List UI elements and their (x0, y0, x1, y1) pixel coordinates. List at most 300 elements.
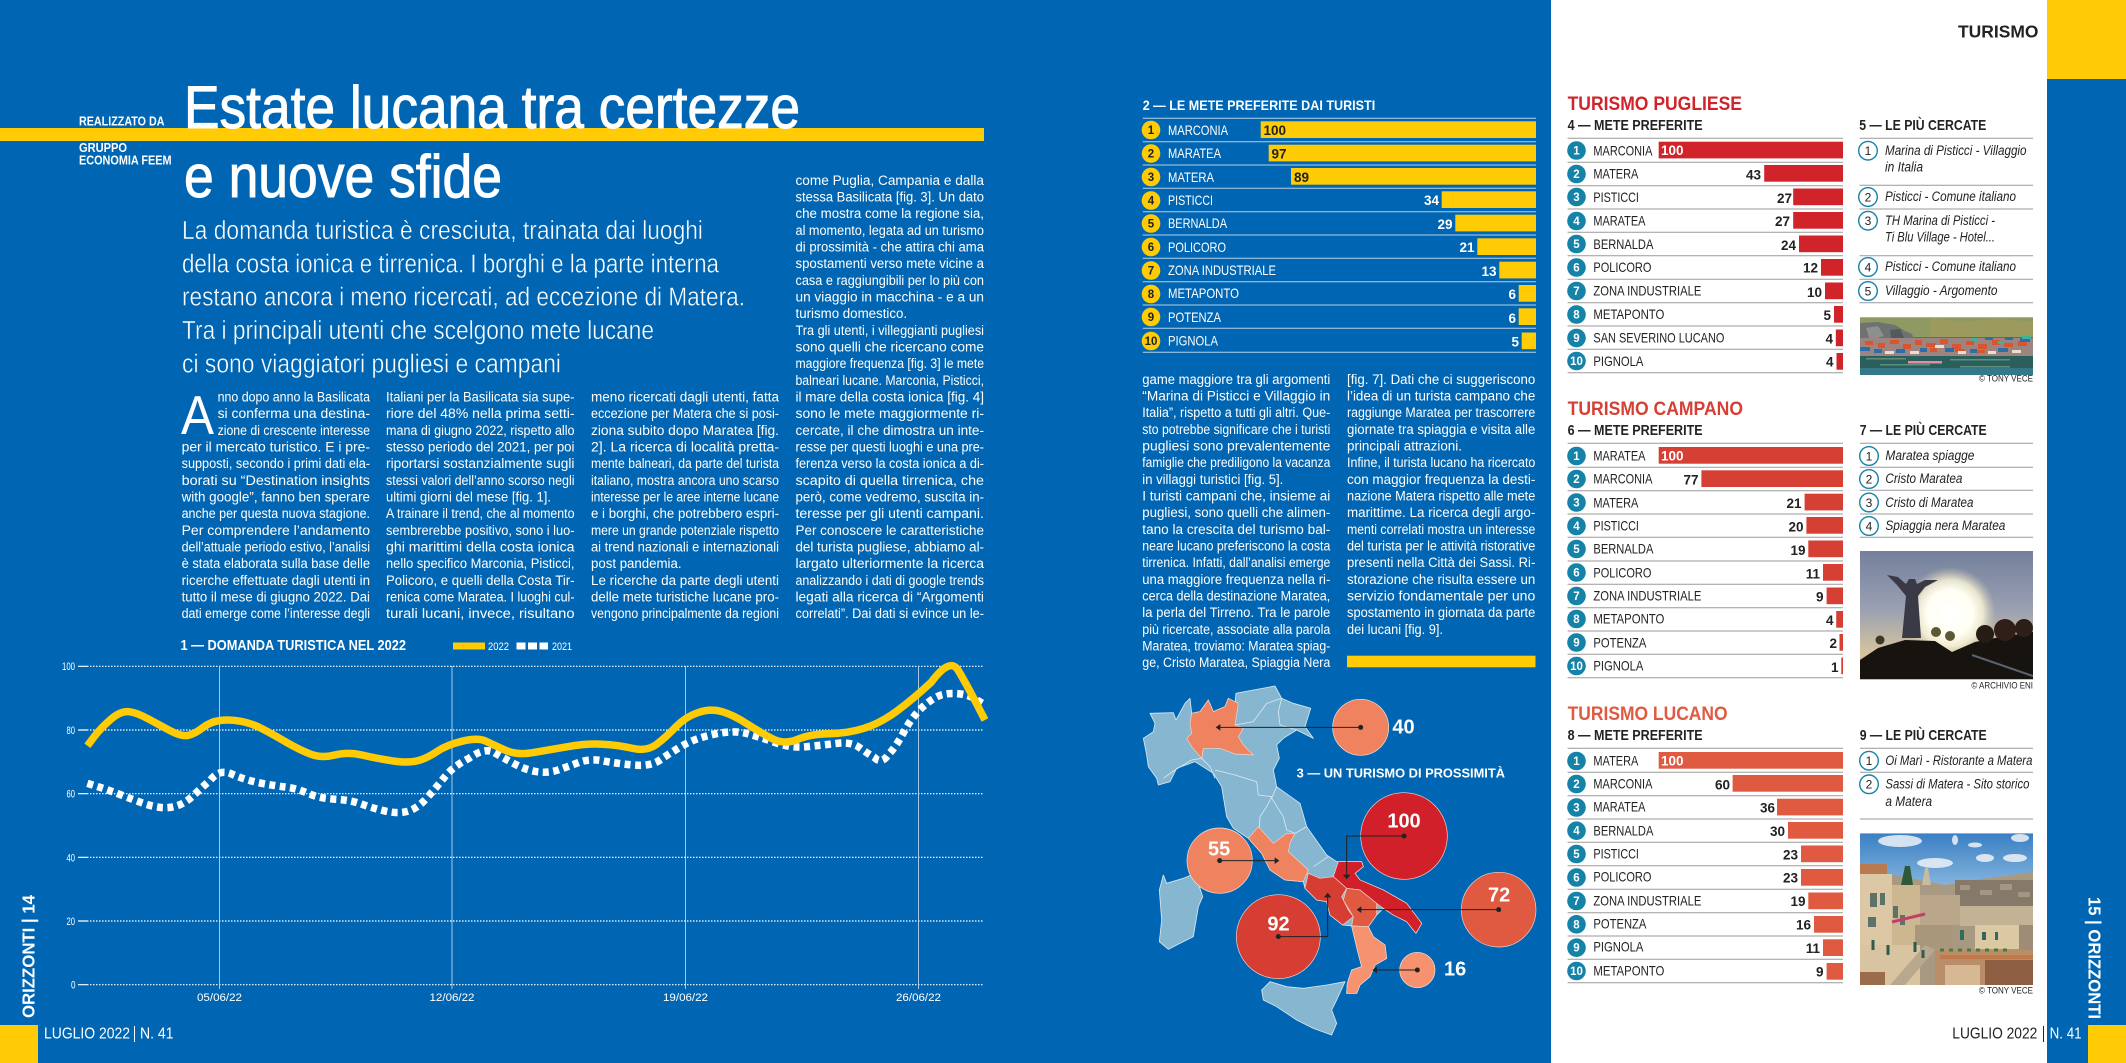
row 1: 1 (1573, 451, 1580, 463)
article column 3: italiano, mostra ancora uno scarso (591, 473, 779, 488)
row 10 (1567, 352, 1843, 370)
right article column B: principali attrazioni. (1347, 438, 1462, 454)
row 5: 19 (1790, 543, 1806, 558)
panel: white right page (1551, 0, 2047, 1063)
article column 3: mente balneari, da parte del turista (591, 456, 779, 471)
right page yellow corner (2088, 1025, 2126, 1063)
article column 1: dati emerge come l’interesse degli (182, 606, 370, 621)
row 5: 5 (1573, 544, 1580, 556)
article column 2: turali lucani, invece, risultano (386, 606, 574, 621)
article column 1: tutto il mese di giugno 2022. Dai (182, 590, 370, 604)
row 9: 4 (1825, 332, 1833, 346)
row 6 (1567, 258, 1843, 277)
right page footer: N. 41 (2050, 1025, 2082, 1042)
row 1: 100 (1661, 754, 1684, 768)
subtitle: della costa ionica e tirrenica. I borghi e la parte interna (182, 250, 720, 278)
row 8: 4 (1826, 613, 1834, 628)
list: most searched, Campania: 2 (1866, 472, 1873, 486)
article column 2: A trainare il trend, che al momento (386, 506, 574, 521)
row 2 (1142, 144, 1536, 163)
article column 2: sembrerebbe positivo, sono i luo- (386, 523, 574, 538)
bubble 72: Basilicata: 72 (1488, 885, 1510, 907)
right article column A: in villaggi turistici [fig. 5]. (1142, 472, 1283, 487)
row 2: 2 (1573, 474, 1580, 486)
list: most searched, Puglia: Ti Blu Village - Hotel... (1885, 230, 1995, 245)
row 7: 7 (1573, 286, 1580, 298)
row 2: 2 (1573, 169, 1580, 181)
row 3: 3 (1573, 802, 1580, 814)
row 4: MARATEA (1593, 212, 1646, 228)
article column 4: legati alla ricerca di “Argomenti (796, 590, 984, 604)
article column 4: Tra gli utenti, i villeggianti pugliesi (796, 323, 984, 338)
right article column A: sto potrebbe significare che i turisti (1142, 422, 1330, 437)
row 9: SAN SEVERINO LUCANO (1593, 330, 1724, 346)
row 3: MATERA (1593, 494, 1639, 510)
row 1: 100 (1661, 143, 1684, 158)
row 7 (1142, 261, 1536, 280)
row 5: BERNALDA (1593, 540, 1654, 556)
row 4: PISTICCI (1593, 518, 1639, 534)
title: Estate lucana tra certezze (184, 74, 800, 141)
right article column A (1142, 372, 1331, 670)
right article column B: nazione Matera rispetto alle mete (1347, 488, 1535, 504)
row 4: PISTICCI (1168, 192, 1213, 208)
bubble 40: Lombardia: 40 (1392, 716, 1415, 738)
row 2: 43 (1746, 168, 1761, 182)
row 3: 27 (1777, 191, 1792, 206)
list: most searched, Puglia: TH Marina di Pisticci - (1885, 213, 1995, 228)
row 8 (1567, 915, 1843, 934)
yellow end bar (1347, 656, 1536, 667)
title: e nuove sfide (184, 143, 502, 210)
row 10: PIGNOLA (1593, 353, 1644, 369)
article column 2: stesso periodo del 2021, per poi (386, 440, 574, 454)
left page footer: LUGLIO 2022 (44, 1025, 130, 1042)
drop cap: A (181, 384, 214, 446)
article column 4: scapito di quella tirrenica, che (796, 473, 984, 488)
list: most searched, Campania: 1 (1866, 449, 1873, 463)
right article column B: [fig. 7]. Dati che ci suggeriscono (1347, 372, 1535, 387)
article column 1 (181, 390, 370, 621)
row 6: 6 (1573, 872, 1580, 884)
article column 1: borati su “Destination insights (182, 473, 370, 488)
row 2: 2 (1148, 148, 1154, 160)
row 4: BERNALDA (1593, 822, 1654, 838)
article column 1: Per comprendere l’andamento (182, 523, 370, 538)
row 6: 6 (1573, 568, 1580, 580)
right article column B: del turista per le attività ristorative (1347, 538, 1535, 554)
line chart: tourist demand 2022 vs 2021: 05/06/22 (197, 992, 242, 1004)
row 3: PISTICCI (1593, 189, 1639, 205)
article column 4: il mare della costa ionica [fig. 4] (796, 390, 984, 404)
row 10 (1142, 332, 1536, 350)
article column 2: ultimi giorni del mese [fig. 1]. (386, 490, 551, 504)
heading: Turismo lucano: TURISMO LUCANO (1568, 704, 1728, 725)
row 9: PIGNOLA (1593, 938, 1644, 954)
row 8: 8 (1148, 289, 1155, 301)
article column 3: ziona subito dopo Maratea [fig. (591, 423, 779, 438)
row 1: 100 (1661, 448, 1684, 464)
right article column A: ge, Cristo Maratea, Spiaggia Nera (1142, 655, 1331, 670)
decorative yellow band (0, 128, 984, 141)
right article column A: più ricercate, associate alla parola (1142, 622, 1331, 637)
subtitle: restano ancora i meno ricercati, ad eccezione di Matera. (182, 284, 745, 312)
row 4: 4 (1573, 521, 1580, 533)
row 2 (1567, 165, 1843, 183)
article column 4: un viaggio in macchina - e a un (796, 290, 984, 304)
left page side label: ORIZZONTI | 14 (18, 895, 38, 1018)
article column 1: nno dopo anno la Basilicata (218, 390, 370, 404)
article column 4: cercate, il che dimostra un inte- (796, 423, 984, 438)
line chart: tourist demand 2022 vs 2021: 80 (66, 725, 75, 737)
article column 4: resse per questi luoghi e una pre- (796, 440, 984, 454)
right page footer: LUGLIO 2022 (1952, 1025, 2037, 1042)
row 3: 3 (1573, 498, 1580, 510)
row 9: 9 (1573, 943, 1580, 955)
bar chart: destinations preferred by tourists (1142, 118, 1536, 352)
row 6: POLICORO (1168, 239, 1226, 255)
row 6: 23 (1783, 870, 1798, 886)
row 2: 60 (1715, 778, 1730, 792)
right article column B: con maggior frequenza la desti- (1347, 472, 1535, 487)
article column 1: è stata elaborata sulla base delle (182, 556, 370, 571)
article column 3: post pandemia. (591, 556, 682, 571)
article column 3: vengono principalmente da regioni (591, 606, 779, 621)
chart 2 heading: 2 — LE METE PREFERITE DAI TURISTI (1143, 97, 1375, 113)
row 1 (1142, 121, 1536, 139)
row 6: 21 (1459, 240, 1475, 255)
row 3 (1142, 168, 1536, 186)
right article column B: l’idea di un turista campano che (1347, 388, 1535, 404)
row 5: 29 (1437, 217, 1452, 232)
list: most searched, Campania (1860, 443, 2033, 537)
row 7 (1567, 587, 1843, 605)
bubble 55: Lazio: 55 (1208, 838, 1230, 860)
row 4: 27 (1775, 214, 1790, 229)
bar chart: Campania (1567, 443, 1843, 678)
article column 4: balneari lucane. Marconia, Pisticci, (796, 373, 984, 388)
row 1: MARATEA (1593, 448, 1646, 464)
row 6: 11 (1806, 566, 1820, 582)
heading: Turismo pugliese: TURISMO PUGLIESE (1568, 94, 1742, 115)
line: 2022 yellow (87, 666, 985, 762)
row 7: 7 (1573, 591, 1580, 603)
line chart: tourist demand 2022 vs 2021: 40 (66, 852, 75, 864)
row 10: PIGNOLA (1168, 332, 1219, 348)
chart legend: 2022 (488, 641, 509, 653)
article column 4: correlati”. Dai dati si evince un le- (796, 606, 984, 621)
list: most searched, Puglia: Villaggio - Argomento (1885, 283, 1998, 298)
row 10: 1 (1831, 660, 1839, 675)
row 5 (1567, 845, 1843, 863)
heading: fig 9: 9 — LE PIÙ CERCATE (1860, 726, 1987, 744)
list: most searched, Puglia: Pisticci - Comune italiano (1885, 189, 2016, 204)
bubble 100: Puglia: 100 (1387, 810, 1421, 832)
article column 4: Per conoscere le caratteristiche (796, 523, 984, 538)
row 9: 6 (1508, 311, 1516, 326)
row 8 (1567, 305, 1843, 324)
article column 3: e i borghi, che potrebbero espri- (591, 506, 779, 521)
row 4: 20 (1788, 520, 1804, 534)
list: most searched, Basilicata: Oi Marì - Ristorante a Matera (1885, 753, 2033, 768)
row 6: POLICORO (1593, 868, 1651, 884)
row 3: MARATEA (1593, 798, 1646, 814)
yellow top right corner (2047, 0, 2126, 79)
row 5: 5 (1573, 239, 1580, 251)
row 4: 4 (1148, 196, 1155, 208)
bubble 55: Lazio (1187, 828, 1279, 893)
row 7 (1567, 282, 1843, 300)
right article column B: giornate tra spiaggia e visita alle (1347, 422, 1535, 437)
row 6: POLICORO (1593, 259, 1651, 275)
row 6: 6 (1573, 262, 1580, 274)
row 2: MATERA (1593, 166, 1639, 182)
row 5 (1567, 235, 1843, 253)
row 9: 9 (1148, 312, 1154, 324)
article column 4: stessa Basilicata [fig. 3]. Un dato (796, 190, 984, 204)
row 5: 5 (1148, 218, 1155, 230)
article column 4: del turista pugliese, abbiamo al- (796, 540, 984, 554)
list: most searched, Basilicata: Sassi di Matera - Sito storico (1885, 776, 2030, 791)
line chart: tourist demand 2022 vs 2021: 100 (62, 661, 75, 673)
row 9: 11 (1806, 941, 1820, 956)
title (184, 74, 800, 210)
row 4 (1567, 517, 1843, 535)
row 10: 10 (1570, 356, 1583, 368)
left page footer: N. 41 (140, 1025, 174, 1042)
row 9: 2 (1829, 636, 1837, 651)
article column 1: supposti, secondo i primi dati ela- (182, 456, 370, 471)
article column 4: teresse per gli utenti campani. (796, 506, 984, 521)
row 2: 97 (1272, 146, 1287, 162)
row 5: 23 (1783, 848, 1798, 862)
subtitle: ci sono viaggiatori pugliesi e campani (182, 350, 561, 378)
article column 2: Italiani per la Basilicata sia supe- (386, 390, 574, 404)
right article column A: pugliesi, sono quelli che alimen- (1142, 505, 1330, 520)
list: most searched, Puglia: 4 (1865, 260, 1872, 274)
article column 2: renica come Maratea. I luoghi cul- (386, 590, 574, 604)
right article column A: tano la crescita del turismo bal- (1142, 522, 1330, 537)
row 8: 8 (1573, 310, 1580, 322)
right article column B: storazione che risulta essere un (1347, 572, 1535, 587)
row 2: 2 (1573, 779, 1580, 791)
heading: fig 4: 4 — METE PREFERITE (1568, 117, 1703, 134)
article column 1: zione di crescente interesse (218, 423, 370, 438)
article column 3: mere un grande potenziale rispetto (591, 523, 779, 538)
row 6: POLICORO (1593, 564, 1651, 580)
row 6: 6 (1148, 242, 1154, 254)
row 4: 4 (1573, 216, 1580, 228)
right article column A: game maggiore tra gli argomenti (1142, 372, 1330, 387)
line chart: tourist demand 2022 vs 2021: 26/06/22 (896, 992, 941, 1004)
row 2: MARATEA (1168, 145, 1222, 161)
list: most searched, Campania: 3 (1866, 496, 1873, 510)
line chart: tourist demand 2022 vs 2021: 0 (71, 980, 76, 992)
row 7: ZONA INDUSTRIALE (1168, 262, 1276, 278)
right article column A: famiglie che prediligono la vacanza (1142, 455, 1331, 470)
article column 4: però, come vedremo, suscita in- (796, 490, 984, 504)
article column 3: Le ricerche da parte degli utenti (591, 573, 779, 588)
chart legend: 2021 (552, 641, 572, 653)
row 8: METAPONTO (1168, 285, 1239, 301)
article column 4: casa e raggiungibili per lo più con (796, 273, 984, 288)
row 4 (1567, 212, 1843, 230)
list: most searched, Basilicata: 2 (1866, 778, 1873, 792)
list: most searched, Campania: Maratea spiagge (1885, 448, 1974, 463)
row 10 (1567, 962, 1843, 980)
right article column B: servizio fondamentale per uno (1347, 588, 1535, 604)
row 5 (1567, 540, 1843, 558)
row 9 (1567, 633, 1843, 652)
row 3: 3 (1148, 172, 1154, 184)
row 3: MATERA (1168, 169, 1215, 185)
right article column A: cerca della destinazione Maratea, (1142, 588, 1330, 604)
row 5: BERNALDA (1593, 236, 1654, 252)
row 1: MARCONIA (1168, 122, 1229, 138)
row 6 (1567, 868, 1843, 887)
regions light blue (1143, 686, 1422, 1035)
section label: TURISMO (1958, 22, 2038, 42)
right article column A: I turisti campani che, insieme ai (1142, 488, 1330, 504)
list: most searched, Puglia (1859, 138, 2033, 303)
article column 1: with google”, fanno ben sperare (181, 490, 370, 504)
line: 2021 dashed white (87, 693, 985, 813)
row 5 (1142, 214, 1536, 233)
row 6: 12 (1803, 260, 1818, 276)
row 9: POTENZA (1168, 309, 1222, 325)
article column 2: ghi marittimi della costa ionica (386, 540, 575, 554)
row 2 (1567, 775, 1843, 793)
map heading: 3 — UN TURISMO DI PROSSIMITÀ (1297, 766, 1505, 781)
article column 4: analizzando i dati di google trends (796, 573, 984, 588)
article column 2: riore del 48% nella prima setti- (386, 406, 574, 421)
row 9: 9 (1573, 333, 1580, 345)
right article column B (1347, 372, 1535, 637)
article column 4: al momento, legata ad un turismo (796, 223, 984, 238)
row 4: 4 (1573, 826, 1580, 838)
article column 2: Policoro, e quelli della Costa Tir- (386, 573, 574, 588)
chart legend (453, 641, 572, 653)
row 10: 10 (1145, 336, 1157, 348)
article column 2: nello specifico Marconia, Pisticci, (386, 556, 574, 571)
highlighted regions (1187, 698, 1422, 993)
row 7: 7 (1148, 266, 1154, 278)
article column 4 (796, 173, 984, 621)
list: most searched, Puglia: 1 (1865, 144, 1872, 158)
byline (79, 114, 172, 168)
article column 1: si conferma una destina- (218, 406, 370, 421)
row 10: METAPONTO (1593, 962, 1664, 978)
article column 2 (386, 390, 575, 621)
article column 3: meno ricercati dagli utenti, fatta (591, 390, 779, 404)
photo: Sassi di Matera (1860, 833, 2033, 985)
article column 3: 2]. La ricerca di località pretta- (591, 440, 779, 454)
row 10: 10 (1570, 661, 1583, 673)
heading: Turismo campano: TURISMO CAMPANO (1568, 399, 1743, 420)
heading: fig 5: 5 — LE PIÙ CERCATE (1859, 116, 1986, 134)
article column 4: come Puglia, Campania e dalla (796, 173, 984, 188)
row 7: ZONA INDUSTRIALE (1593, 588, 1701, 604)
row 8: 6 (1508, 287, 1516, 302)
list: most searched, Basilicata: a Matera (1885, 794, 1933, 809)
line chart: tourist demand 2022 vs 2021: 12/06/22 (430, 992, 474, 1004)
right page side label: 15 | ORIZZONTI (2084, 897, 2104, 1019)
row 3: 21 (1786, 496, 1802, 511)
row 7: 10 (1807, 285, 1822, 300)
list: most searched, Campania: Cristo di Maratea (1885, 495, 1974, 510)
credit: © TONY VECE (1979, 985, 2033, 996)
row 3: 3 (1573, 192, 1580, 204)
bar chart: Puglia (1567, 138, 1843, 373)
right article column B: spostamento in giornata da parte (1347, 605, 1535, 620)
right article column B: dei lucani [fig. 9]. (1347, 622, 1443, 637)
row 4: 30 (1770, 824, 1785, 839)
row 4 (1567, 821, 1843, 840)
bubble 40: Lombardia (1216, 699, 1415, 755)
credit: © ARCHIVIO ENI (1971, 680, 2033, 691)
article column 1: ricerche effettuate dagli utenti in (182, 573, 370, 588)
row 5: PISTICCI (1593, 846, 1639, 862)
heading: fig 8: 8 — METE PREFERITE (1568, 727, 1703, 744)
row 3: 36 (1760, 800, 1775, 816)
row 10: PIGNOLA (1593, 658, 1644, 674)
row 7: 13 (1481, 264, 1497, 279)
list: most searched, Puglia: in Italia (1885, 160, 1923, 175)
row 9 (1567, 329, 1843, 347)
article column 4: largato ulteriormente la ricerca (796, 556, 984, 571)
bubble 92: Campania (1236, 893, 1331, 979)
row 4 (1142, 191, 1536, 210)
list: most searched, Campania: Spiaggia nera Maratea (1885, 518, 2006, 533)
line chart: tourist demand 2022 vs 2021: 19/06/22 (663, 992, 708, 1004)
article column 2: riportarsi sostanzialmente sugli (386, 456, 574, 471)
row 10: 4 (1826, 354, 1834, 370)
row 1: 100 (1264, 123, 1286, 138)
row 1 (1567, 141, 1843, 160)
right article column B: Infine, il turista lucano ha ricercato (1347, 455, 1535, 470)
row 6 (1567, 563, 1843, 582)
article column 4: ferenza verso la costa ionica a di- (796, 456, 984, 471)
article column 2: stessi valori dell’anno scorso negli (386, 473, 574, 488)
row 8: 8 (1573, 614, 1580, 626)
row 10 (1567, 657, 1843, 675)
row 9: 9 (1573, 638, 1580, 650)
subtitle: Tra i principali utenti che scelgono mete lucane (182, 317, 654, 345)
row 8: 16 (1796, 918, 1811, 932)
subtitle (182, 217, 745, 378)
right article column A: una maggiore frequenza nella ri- (1142, 572, 1330, 587)
subtitle: La domanda turistica è cresciuta, trainata dai luoghi (182, 217, 703, 245)
right article column A: pugliesi sono prevalentemente (1142, 438, 1330, 454)
credit: © TONY VECE (1979, 374, 2033, 385)
line chart: tourist demand 2022 vs 2021: 60 (66, 789, 75, 801)
article column 3: delle mete turistiche lucane pro- (591, 590, 779, 604)
list: most searched, Puglia: 5 (1865, 284, 1872, 298)
row 3 (1567, 798, 1843, 817)
photo: Cristo di Maratea at sunset (1860, 551, 2033, 680)
row 1: 1 (1573, 146, 1580, 158)
row 2: MARCONIA (1593, 470, 1653, 486)
row 8: METAPONTO (1593, 610, 1664, 626)
line chart: tourist demand 2022 vs 2021: 20 (66, 916, 75, 928)
row 1 (1567, 447, 1843, 465)
row 10: 5 (1511, 334, 1519, 350)
photo: crowded beach (1860, 317, 2033, 375)
line chart: tourist demand 2022 vs 2021 (62, 661, 985, 1004)
right article column B: marittime. La ricerca degli argo- (1347, 505, 1535, 520)
bar chart: Basilicata (1567, 748, 1843, 983)
article column 1: anche per questa nuova stagione. (182, 506, 370, 521)
